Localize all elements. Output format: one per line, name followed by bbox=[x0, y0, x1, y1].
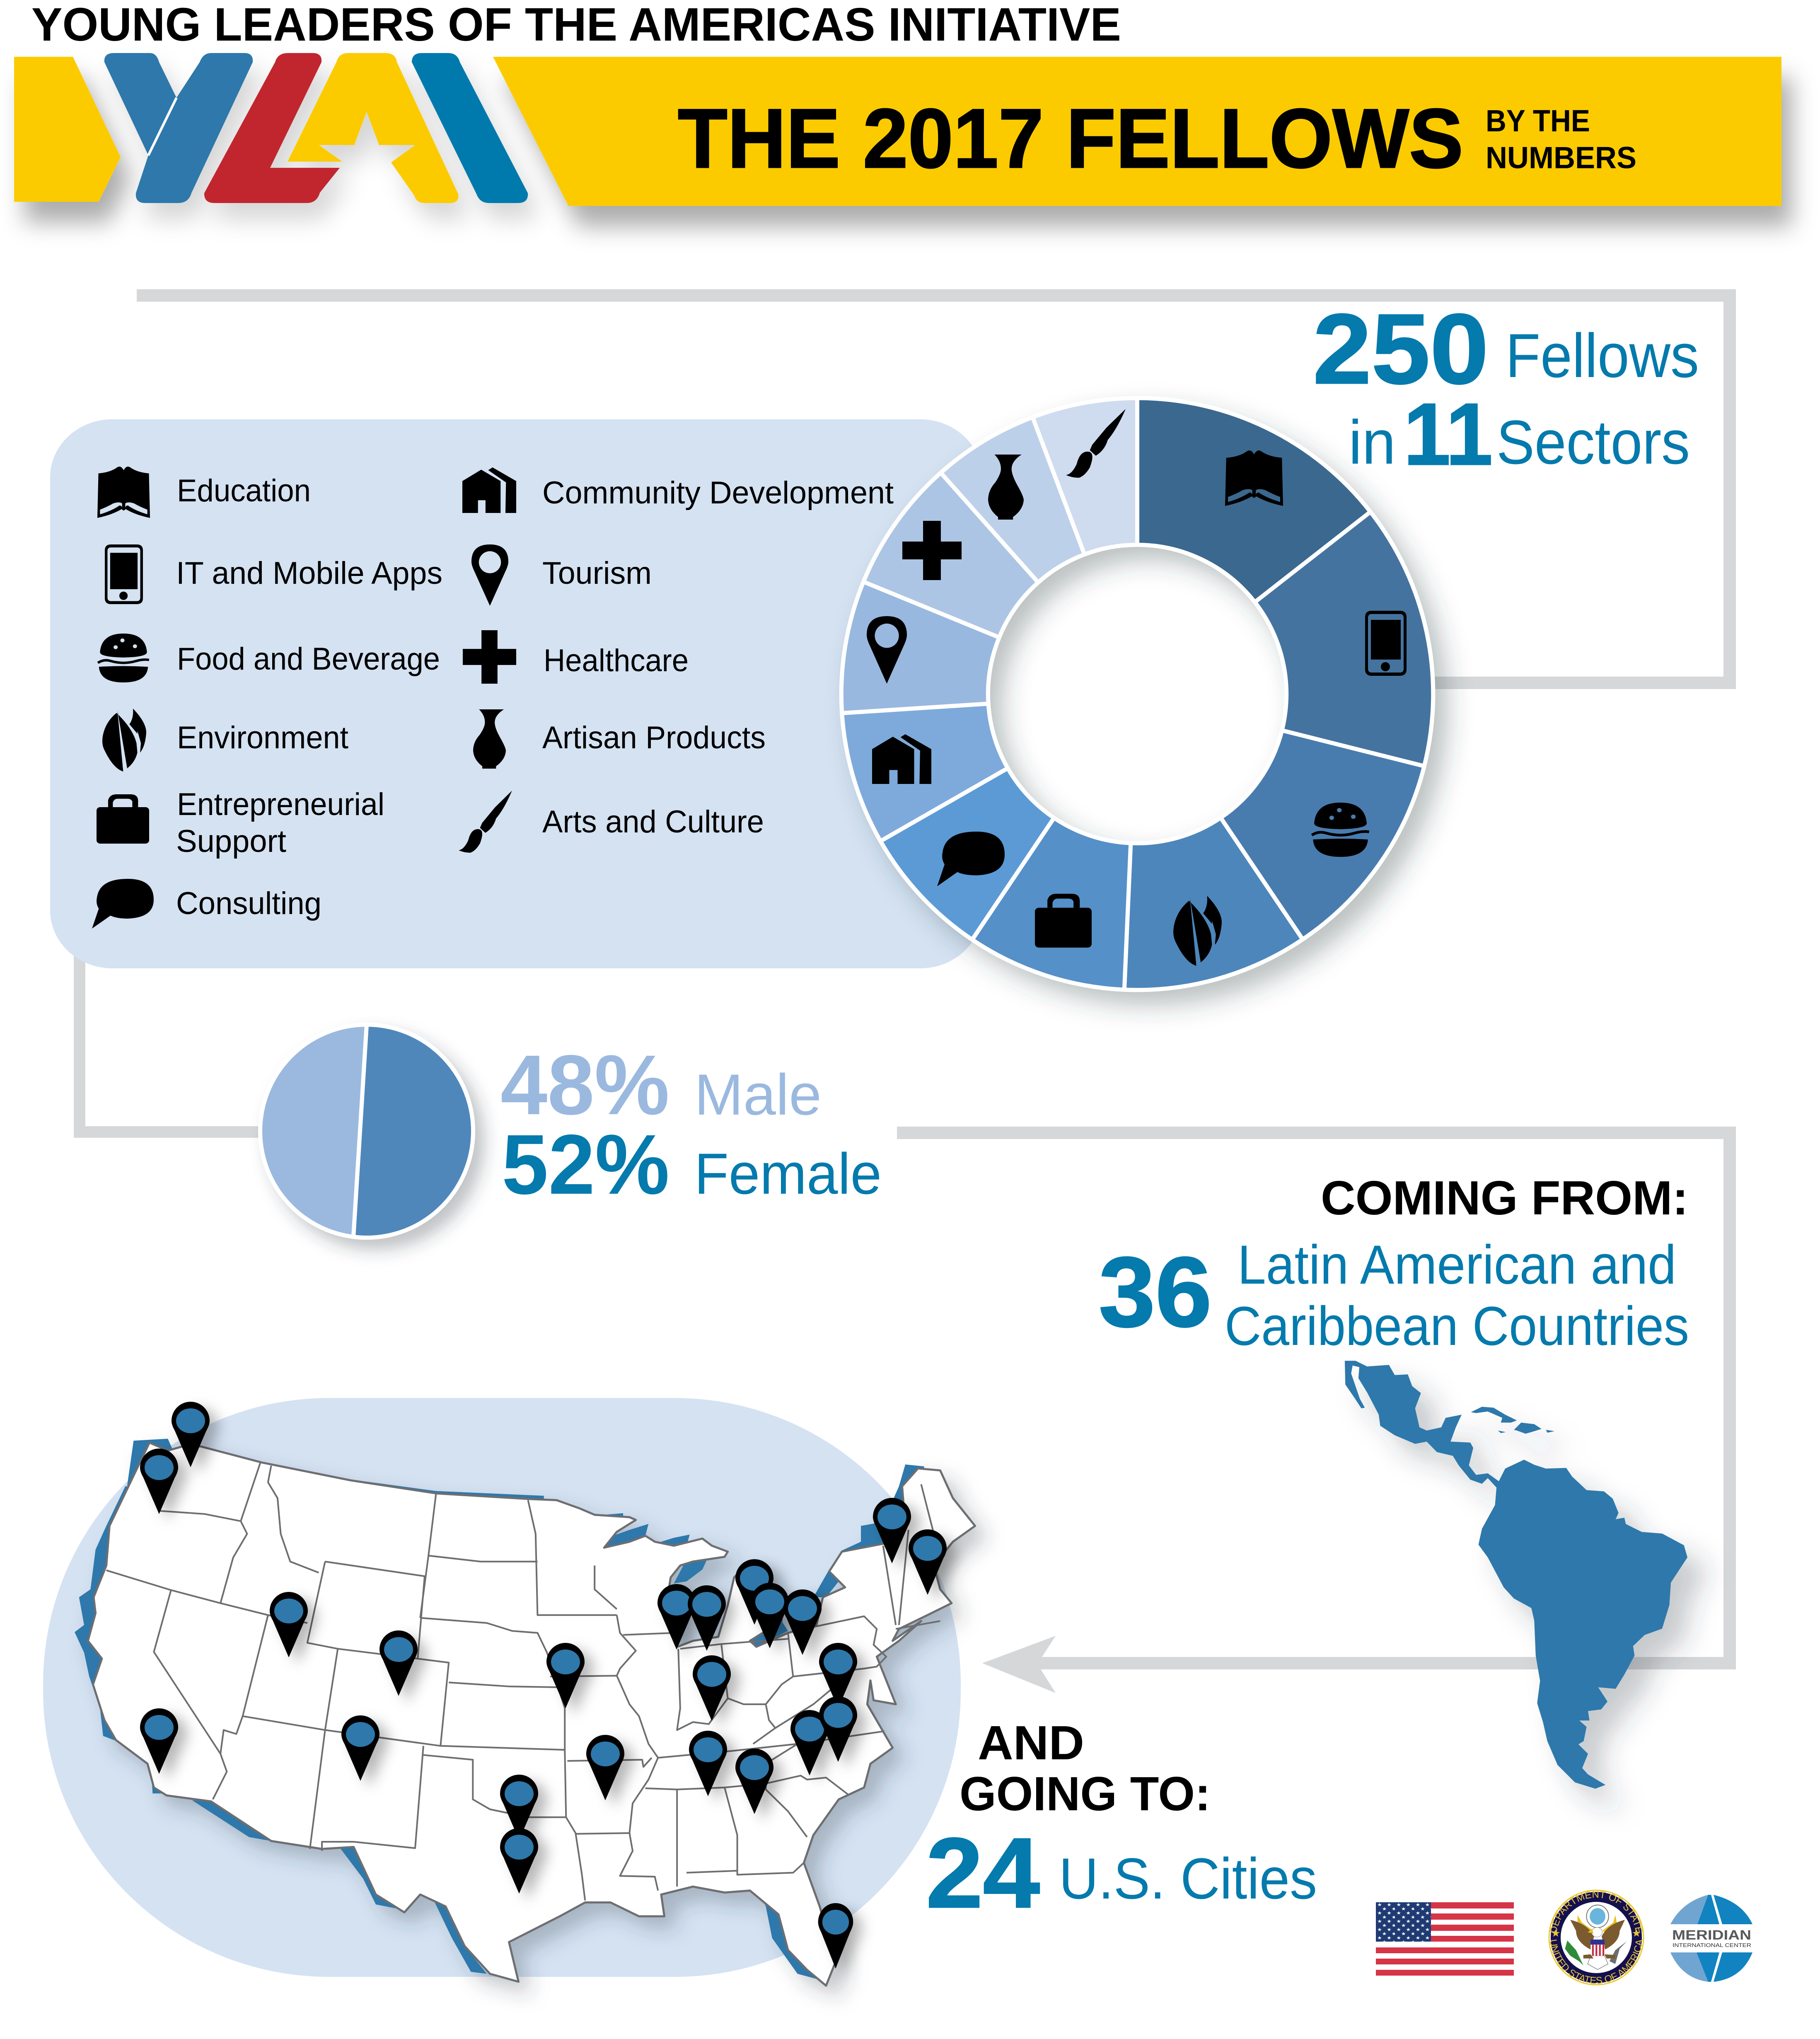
pin: Cleveland area bbox=[783, 1589, 822, 1655]
legend background bbox=[50, 419, 982, 968]
stat: 48% male: 48% bbox=[500, 1038, 670, 1132]
connector frame: sectors to gender pie bbox=[80, 953, 269, 1132]
icon: phone bbox=[1365, 611, 1407, 676]
logo: Meridian International Center bbox=[1670, 1895, 1752, 1982]
icon: burger bbox=[1312, 803, 1369, 857]
stat: 250 Fellows in 11 Sectors: 11 bbox=[1404, 385, 1493, 483]
pin: Portland area bbox=[140, 1449, 178, 1514]
legend item: Community Development bbox=[462, 467, 894, 513]
logo: Meridian International Center: INTERNATIONAL CENTER bbox=[1673, 1942, 1751, 1948]
logo letter L bbox=[204, 53, 340, 203]
banner subtitle: BY THE bbox=[1486, 104, 1590, 138]
legend item: Entrepreneurial Support: Entrepreneurial bbox=[177, 787, 384, 822]
stat: 24 U.S. cities bbox=[926, 1817, 1317, 1928]
stat: 250 Fellows in 11 Sectors: Sectors bbox=[1496, 407, 1690, 477]
legend item: Entrepreneurial Support: Support bbox=[176, 824, 286, 859]
slice: 48% male bbox=[260, 1025, 367, 1237]
legend item: Tourism: Tourism bbox=[542, 556, 652, 591]
banner subtitle bbox=[1486, 104, 1636, 175]
stat: 250 Fellows in 11 Sectors: Fellows bbox=[1506, 321, 1699, 390]
land outline bbox=[88, 1443, 975, 1986]
logo letter A with star bbox=[288, 53, 459, 203]
pin: Arkansas bbox=[586, 1735, 624, 1800]
pin: Central Texas bbox=[500, 1828, 538, 1894]
heading: and going to bbox=[960, 1716, 1211, 1821]
connector frame: top to sectors bbox=[137, 295, 1730, 683]
slice: Artisan Products bbox=[941, 417, 1085, 583]
pin: Seattle area bbox=[172, 1402, 210, 1467]
legend item: Entrepreneurial Support bbox=[97, 787, 384, 859]
logo: Department of State seal: DEPARTMENT OF STATE bbox=[1548, 1889, 1645, 1934]
stat: 250 Fellows in 11 Sectors: 250 bbox=[1313, 293, 1489, 404]
stat: 48% male bbox=[500, 1038, 822, 1132]
legend item: Food and Beverage: Food and Beverage bbox=[177, 641, 440, 677]
heading: coming from: COMING FROM: bbox=[1321, 1171, 1688, 1225]
stat: 36 countries bbox=[1099, 1234, 1689, 1357]
legend item: Consulting bbox=[92, 879, 321, 929]
legend item: IT and Mobile Apps: IT and Mobile Apps bbox=[176, 556, 442, 591]
stat: 52% female: Female bbox=[694, 1141, 882, 1206]
stat: 250 Fellows in 11 Sectors bbox=[1313, 293, 1699, 483]
pin: Indianapolis area bbox=[693, 1655, 731, 1721]
logo: Department of State seal: UNITED STATES OF AMERICA bbox=[1547, 1939, 1645, 1986]
icon: paint brush bbox=[1066, 409, 1126, 478]
pin: Detroit area bbox=[751, 1583, 789, 1648]
legend item: Consulting: Consulting bbox=[176, 886, 321, 921]
icon: book bbox=[1225, 450, 1283, 506]
logo letter I stroke bbox=[412, 53, 528, 203]
pin: Washington area bbox=[819, 1643, 857, 1708]
pin: Boston area bbox=[909, 1529, 947, 1595]
panel: sector legend bbox=[50, 419, 982, 968]
legend item: Education: Education bbox=[177, 473, 311, 508]
slice: Entrepreneurial Support bbox=[972, 818, 1131, 990]
legend item: Healthcare bbox=[463, 630, 689, 684]
donut icons bbox=[867, 409, 1407, 966]
slice: Food and Beverage bbox=[1221, 730, 1424, 939]
logo letter Y bbox=[104, 53, 253, 203]
stat: 24 U.S. cities: U.S. Cities bbox=[1059, 1846, 1317, 1911]
logo: Department of State seal bbox=[1547, 1889, 1645, 1986]
connector frame: gender to countries and cities bbox=[897, 1133, 1730, 1663]
stat: 24 U.S. cities: 24 bbox=[926, 1817, 1040, 1928]
pin: Chicago area bbox=[657, 1584, 696, 1650]
legend item: Education bbox=[97, 467, 311, 518]
pin: Dallas area bbox=[500, 1775, 538, 1840]
logo: Meridian International Center: MERIDIAN bbox=[1672, 1928, 1751, 1942]
arrow head pointing to U.S. map bbox=[982, 1636, 1056, 1693]
pin: Atlanta area bbox=[735, 1749, 773, 1814]
icon: map pin bbox=[867, 616, 907, 684]
icon: medical cross bbox=[902, 521, 962, 580]
icon: speech bubble bbox=[937, 832, 1005, 886]
legend item: IT and Mobile Apps bbox=[105, 544, 442, 604]
panel: U.S. map background bbox=[43, 1398, 961, 1977]
slice: Consulting bbox=[880, 768, 1054, 940]
pin: Nashville area bbox=[689, 1731, 727, 1796]
icon: briefcase bbox=[1035, 894, 1092, 948]
stat: 52% female bbox=[502, 1117, 882, 1212]
stat: 36 countries: 36 bbox=[1099, 1236, 1212, 1347]
legend item: Healthcare: Healthcare bbox=[544, 643, 689, 678]
coastal shading bbox=[75, 1439, 924, 1980]
icon: house bbox=[872, 734, 931, 784]
pie chart: gender split bbox=[260, 1025, 473, 1238]
pin: Virginia bbox=[819, 1696, 857, 1762]
legend item: Artisan Products: Artisan Products bbox=[542, 720, 766, 755]
pin: Miami area bbox=[818, 1903, 853, 1969]
stat: 36 countries: Caribbean Countries bbox=[1225, 1296, 1689, 1357]
legend item: Artisan Products bbox=[473, 709, 766, 769]
map: United States bbox=[75, 1439, 975, 1986]
banner subtitle: NUMBERS bbox=[1486, 140, 1636, 175]
slice: Community Development bbox=[842, 704, 1008, 841]
pin: Omaha area bbox=[546, 1643, 585, 1708]
pin: Los Angeles area bbox=[140, 1708, 178, 1774]
slice: Education bbox=[1137, 398, 1370, 602]
map pins: 24 U.S. cities bbox=[140, 1402, 947, 1969]
pin: Michigan north bbox=[735, 1559, 773, 1625]
stat: 250 Fellows in 11 Sectors: in bbox=[1349, 407, 1396, 477]
stat: 36 countries: Latin American and bbox=[1238, 1234, 1676, 1296]
logo: U.S. flag bbox=[1376, 1902, 1514, 1976]
slice: Healthcare bbox=[863, 473, 1038, 637]
icon: vase bbox=[988, 455, 1024, 520]
pin: Denver area bbox=[379, 1630, 418, 1696]
banner title: THE 2017 FELLOWS bbox=[678, 92, 1463, 186]
pin: Albuquerque area bbox=[341, 1715, 379, 1781]
stat: 52% female: 52% bbox=[502, 1117, 670, 1212]
legend item: Environment: Environment bbox=[177, 720, 348, 755]
heading: and going to: AND bbox=[978, 1716, 1084, 1770]
legend item: Community Development: Community Development bbox=[542, 475, 894, 510]
icon: leaves bbox=[1173, 896, 1222, 966]
map: Latin America bbox=[1345, 1361, 1687, 1789]
donut chart: 11 sectors bbox=[841, 398, 1433, 990]
legend item: Arts and Culture: Arts and Culture bbox=[542, 804, 764, 839]
state borders bbox=[106, 1463, 940, 1901]
slice: Arts and Culture bbox=[1032, 398, 1137, 554]
legend item: Environment bbox=[102, 709, 348, 772]
pin: North Carolina west bbox=[790, 1710, 829, 1775]
slice: IT and Mobile Apps bbox=[1255, 512, 1433, 766]
pin: Salt Lake City area bbox=[270, 1592, 308, 1657]
legend item: Food and Beverage bbox=[98, 634, 440, 682]
stat: 48% male: Male bbox=[694, 1062, 822, 1127]
legend item: Arts and Culture bbox=[459, 791, 764, 853]
legend item: Tourism bbox=[471, 544, 652, 606]
pin: Vermont bbox=[873, 1498, 911, 1563]
banner: yellow header band bbox=[14, 57, 1781, 206]
heading: and going to: GOING TO: bbox=[960, 1767, 1211, 1821]
logo: YLAI letters bbox=[104, 53, 528, 203]
slice: Environment bbox=[1124, 818, 1303, 990]
slice: 52% female bbox=[353, 1025, 473, 1238]
slice: Tourism bbox=[841, 582, 999, 713]
pin: South Bend area bbox=[688, 1585, 726, 1651]
